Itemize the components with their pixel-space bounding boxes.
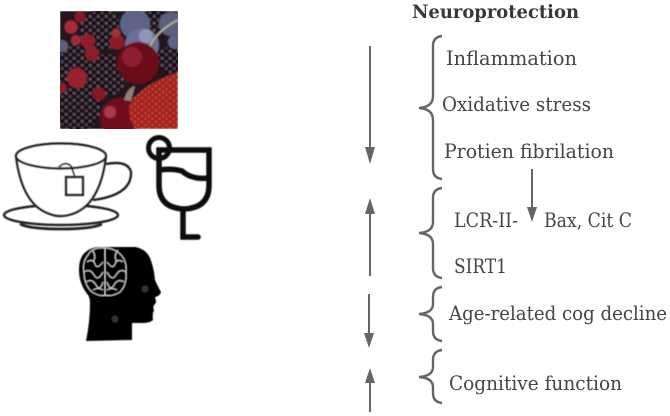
text: Bax, Cit C: Bax, Cit C [544,208,632,232]
text: Oxidative stress: Oxidative stress [442,92,591,116]
arrow: small down, Bax and Cit C [527,169,537,222]
arrow: up, group 4 [365,368,375,412]
saucer [4,205,118,225]
cup handle [93,163,131,200]
tea tag [66,177,83,195]
icon: head with brain [79,247,161,341]
text: LCR-II-: LCR-II- [454,208,518,232]
icon: wine glass [148,138,209,237]
image: mixed berries [60,11,178,129]
brace: group 3 [419,287,442,341]
brace: group 2 [419,188,442,278]
arrow: down, group 1 [365,46,375,164]
heading: Neuroprotection: Neuroprotection [412,2,580,23]
icon: tea cup [4,144,131,229]
brace: group 1 [419,36,442,179]
brain [84,248,126,296]
text: SIRT1: SIRT1 [454,254,507,278]
text: Cognitive function: Cognitive function [449,371,622,395]
cup rim [16,144,106,168]
brace: group 4 [419,350,442,403]
text: Protien fibrilation: Protien fibrilation [444,139,614,163]
watermark dots [142,286,148,292]
arrow: up, group 2 [365,198,375,276]
arrow: down, group 3 [364,294,374,348]
text: Inflammation: Inflammation [446,46,577,70]
cup bowl [16,156,106,216]
